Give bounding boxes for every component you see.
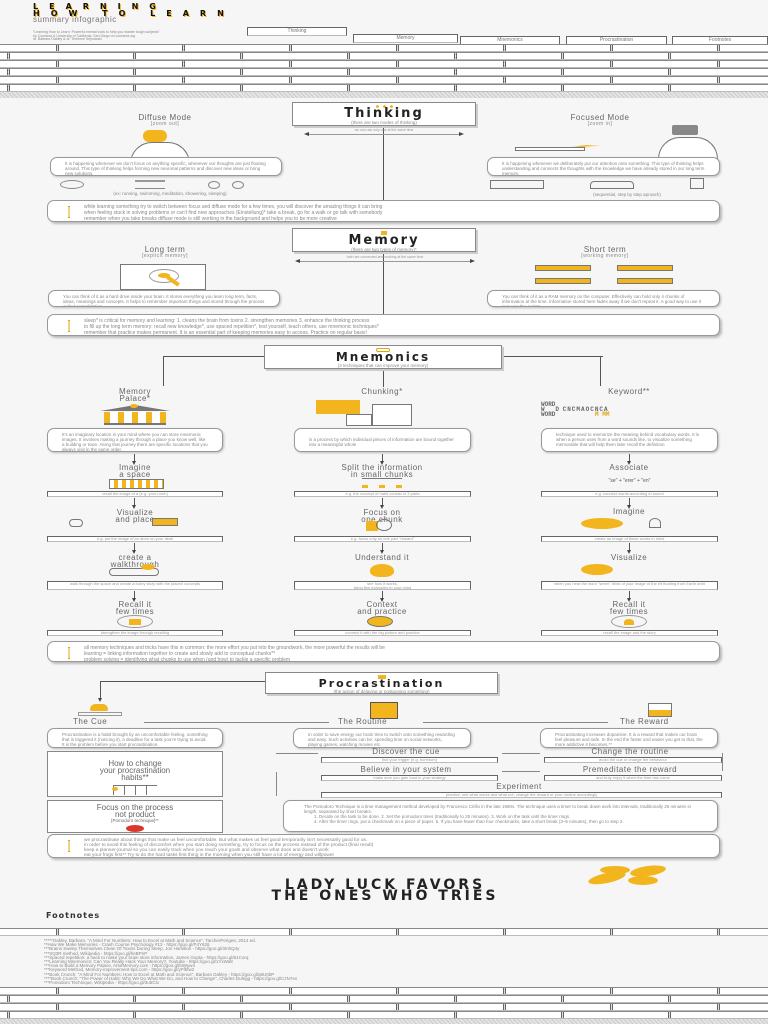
heading: Mnemonics: (3 techniques that can improve your memory)	[338, 363, 428, 368]
citation: dr. Barbara Oakley & dr. Terrence Sejnowski	[33, 37, 102, 41]
header title	[33, 2, 235, 18]
tip: sleep: to fill up the long term memory: recall new knowledge*, use spaced repetition*, test yourself, teach others, use mnemonic techniques*	[84, 324, 379, 330]
icons: diffuse activities	[60, 180, 244, 189]
tip: groundwork: learning = linking information together to create and slowly add to conceptual chunks**	[84, 651, 275, 657]
column: Chunking: Focus on	[364, 508, 400, 517]
tip: procrastination advice: in order to avoid this feeling of discomfort when you start doing something, try to focus on the process instead of the product (final result)	[84, 843, 373, 848]
label: Short term: [working memory]	[581, 253, 629, 259]
tip: switching modes	[47, 200, 720, 222]
nav tabs: Footnotes	[709, 37, 731, 43]
icon: RAM sticks	[535, 265, 673, 284]
column: Memory Palace: Imagine	[119, 463, 151, 472]
column: Keyword: e.g. connect words according to sound	[595, 491, 664, 496]
column: Keyword: few times	[610, 607, 648, 616]
column: Chunking: one chunk	[361, 515, 403, 524]
nav tabs: Memory	[396, 35, 415, 41]
column: Chunking: Context	[366, 600, 398, 609]
column: Memory Palace: e.g. put the image of an atom on your desk	[97, 536, 173, 541]
label: Diffuse Mode	[138, 113, 192, 127]
flow: cue routine reward: The Reward	[620, 717, 669, 726]
tip: procrastination advice: eat your frogs first** Try to do the hard tasks first thing in the morning when you still have a lot of energy and willpower	[84, 853, 334, 858]
label: Short term	[581, 245, 629, 259]
column: Chunking: connect it with the big picture and practice	[345, 630, 420, 635]
column: Memory Palace: Palace*	[119, 394, 151, 403]
text: footnotes list: *****Oakley, Barbara. "A Mind For Numbers: How to Excel at Math and Science", TarcherPerigee, 2014 ed.	[44, 938, 256, 943]
text: footnotes list: ****Book Crunch: "The Power of Habit: Why We Do What We Do, and How to Change", Charles Duhigg - https://goo.gl/CzN7ev	[44, 976, 297, 981]
steps: habit change flow: find your trigger (e.g. boredom)	[382, 757, 437, 762]
column: Chunking	[294, 387, 473, 636]
nav tabs	[247, 27, 768, 44]
text: diffuse bubble: It is happening whenever we don't focus on anything specific, whenever our thoughts are just floating around. This type of thinking helps forming new neuronal patterns and discover new ideas or bring new solutions.	[65, 161, 266, 176]
steps: habit change flow: Believe in your system	[360, 765, 452, 774]
tip: switching modes: while learning something try to switch between focus and diffuse mode for a few times, you will discover the amazing things it can bring	[84, 204, 382, 210]
column: Chunking: Understand it	[355, 553, 409, 562]
icon: diffuse head	[131, 130, 189, 157]
column: Memory Palace: strengthen the image through recalling	[101, 630, 169, 635]
text: footnotes list: ***How to Build a Memory Palace, ArtofMemory.com - https://goo.gl/5iWyw4	[44, 963, 195, 968]
heading: Procrastination: (the action of delaying or postponing something)	[333, 689, 430, 694]
text: reward bubble: Procrastinating increases dopamine. It is a reward that makes our brain feel pleasure and safe. In the end the faster and easier you get to that, the more addictive it becomes.**	[555, 732, 703, 747]
column: Chunking: Split the information	[341, 463, 423, 472]
column: Chunking: Chunking*	[361, 387, 403, 396]
column: Chunking: bring few examples in your mind	[354, 585, 411, 590]
text: focused bubble: It is happening whenever we deliberately put our attention onto something. This type of thinking helps understanding and connects the thoughts with the knowledge we have already stored in our long term memory.	[502, 161, 704, 176]
column: Keyword: Keyword**	[608, 387, 650, 396]
heading: Mnemonics: Mnemonics	[336, 350, 430, 364]
steps: habit change flow: Discover the cue	[372, 747, 440, 756]
heading: Memory: (there are two types of memory)*	[351, 247, 417, 252]
panel: Focus on process: not product	[115, 810, 155, 819]
icon: routine phone	[370, 702, 398, 719]
citation: "Learning How to Learn: Powerful mental tools to help you master tough subjects"	[33, 30, 160, 34]
column: Keyword: technique used to memorize the meaning behind vocabulary words. It is when a person uses from a word sounds like, to visualize something memorable that will help them later recall the definition	[556, 432, 699, 447]
flow: cue routine reward: The Cue	[73, 717, 107, 726]
column: Memory Palace: Visualize	[117, 508, 153, 517]
icon: hard drive	[120, 264, 206, 290]
nav tabs: Mnemonics	[497, 37, 523, 43]
header title: LEARNING	[33, 2, 167, 11]
tip: sleep: sleep* is critical for memory and learning: 1. cleans the brain from toxins 2. strengthen memories 3. enhance the thinking process	[84, 318, 369, 324]
column: Chunking: see how it works,	[367, 581, 398, 586]
panel: How to change habits: your procrastination	[100, 766, 170, 775]
column: Chunking: e.g. focus only on one part "reward"	[351, 536, 414, 541]
heading: Memory: Memory	[348, 233, 420, 248]
headline: lady luck: LADY LUCK FAVORS	[285, 877, 485, 893]
steps: habit change flow	[276, 747, 723, 798]
icon: palace	[100, 404, 170, 425]
column: Chunking: e.g. the concept of habit consist of 3 parts	[345, 491, 420, 496]
column: Keyword: recall the image and the story	[603, 630, 656, 635]
column: Memory Palace: few times	[116, 607, 154, 616]
text: footnotes list	[44, 938, 298, 985]
column: Memory Palace: a space	[119, 470, 151, 479]
text: cue bubble: Procrastination is a habit brought by an uncomfortable feeling, something that is triggered it (noticing it), a deadline for a task you're trying to avoid. It is the problem before you start procrastination.	[62, 732, 208, 747]
text: pomodoro bubble	[283, 800, 718, 832]
label: Focused Mode	[571, 113, 629, 127]
text: long term bubble	[48, 290, 280, 307]
column: Memory Palace: create a	[119, 553, 151, 562]
text: routine bubble	[293, 728, 471, 748]
tip: procrastination advice: we procrastinate about things that make us feel uncomfortable. But what makes us feel good temporarily isn't necessarily good for us.	[84, 838, 367, 843]
section: Mnemonics	[47, 345, 723, 665]
text: pomodoro bubble: The Pomodoro Technique is a time management method developed by Francesco Cirillo in the late 1980s. The technique uses a timer to break down work into intervals, traditionally 25 minutes in length, separated by short breaks.	[304, 804, 691, 814]
label: Long term: Long term	[145, 245, 185, 254]
flow: cue routine reward	[73, 717, 669, 726]
arrow: connected: both are connected and working at the same time	[347, 255, 423, 259]
panel: How to change habits: habits**	[121, 773, 149, 782]
icon: keyword	[541, 401, 610, 418]
text: reward bubble	[540, 728, 718, 748]
flow: cue routine reward: The Routine	[338, 717, 387, 726]
icon: clover	[588, 866, 666, 885]
column: Chunking: and practice	[357, 607, 407, 616]
section: Memory	[47, 228, 723, 339]
column: Keyword: create an image of these words in mind	[595, 536, 664, 541]
arrow: one at a time: we can use only one at the same time	[355, 128, 413, 132]
icon: keyword: WORD M MM	[541, 411, 609, 418]
text: footnotes list: ***Book Crunch: "A Mind For Numbers: How to Excel at Math and Science", Barbara Oakley - https://goo.gl/q8U0bP	[44, 972, 274, 977]
tip: switching modes: when feeling stuck in solving problems or can't find new approaches (Einstellung)* take a break, go for a walk or go talk with somebody	[84, 210, 382, 216]
icons: focused activities	[490, 178, 704, 189]
column: Keyword: Visualize	[611, 553, 647, 562]
text: footnotes list: ***Brains Sweep Themselves Clean Of Toxins During Sleep, Jon Hamilton - https://goo.gl/3mhQ4y	[44, 946, 239, 951]
label: Long term	[142, 245, 188, 259]
tip: sleep	[47, 314, 720, 336]
icon: reward	[648, 703, 672, 717]
panel: Focus on process: [Pomodoro technique]**	[111, 818, 159, 823]
headline: lady luck: THE ONES WHO TRIES	[272, 888, 498, 904]
column: Chunking: in small chunks	[351, 470, 413, 479]
label: Focused Mode: Focused Mode	[571, 113, 629, 122]
column: Memory Palace: and place	[115, 515, 155, 524]
steps: habit change flow: Premeditate the reward	[583, 765, 677, 774]
label: Diffuse Mode: Diffuse Mode	[138, 113, 192, 122]
label: Focused Mode: [zoom in]	[588, 121, 612, 127]
column: Keyword: when you hear the word "seren" think of your image of the elf floating from Earth orbit	[554, 581, 705, 586]
label: Long term: [explicit memory]	[142, 253, 188, 259]
text: diffuse bubble	[50, 157, 282, 176]
panel: Focus on process	[47, 800, 223, 833]
text: short term bubble	[487, 290, 720, 307]
nav tabs: Thinking	[288, 28, 306, 34]
caption: diffuse activities: (ex: running, swimming, meditation, showering, sleeping)	[113, 191, 227, 196]
column: Keyword	[541, 387, 720, 636]
nav tabs: Procrastination	[600, 37, 633, 43]
header title: HOW TO LEARN	[33, 9, 235, 18]
label: Short term: Short term	[584, 245, 626, 254]
column: Memory Palace	[47, 387, 225, 636]
section: Procrastination	[47, 672, 723, 861]
icon: keyword: W D CNCMAOCNCA	[541, 406, 609, 413]
heading: Thinking: (there are two modes of thinking)	[351, 120, 417, 125]
column: Keyword: Imagine	[613, 507, 645, 516]
text: footnotes list: ***Learning Mnemonics: Can You Really Hack Your Memory?, Youtube - https://goo.gl/1YxWa8	[44, 959, 233, 964]
text: cue bubble	[47, 728, 223, 748]
icon: puzzle	[316, 400, 412, 426]
tip: procrastination advice	[47, 834, 720, 858]
tip: procrastination advice: keep a planner-journal so you can easily track when you reach your goals and observe what does and doesn't work	[84, 848, 329, 853]
icon: cue bell	[78, 704, 122, 716]
column: Memory Palace: Memory	[119, 387, 151, 396]
column: Memory Palace: walk through the space and create a funny story with the placed concepts	[70, 581, 200, 586]
tip: groundwork	[47, 641, 720, 662]
steps: habit change flow: Experiment	[496, 782, 542, 791]
caption: sequential: (sequential, step by step aproach)	[593, 192, 661, 197]
heading: Mnemonics	[264, 345, 502, 369]
text: pomodoro bubble: 1. Decide on the task to be done. 2. Set the pomodoro timer (traditionally to 25 minutes). 3. Work on the task until the timer rings.	[314, 814, 570, 819]
subtitle: summary infographic	[33, 15, 117, 24]
panel: How to change habits: How to change	[108, 759, 162, 768]
tip: groundwork: all memory techniques and tricks have this in common: the more effort you put into the groundwork, the more powerful the results will be	[84, 645, 385, 651]
tip: sleep: remember that practice makes permanent. It is an essential part of keeping memories easy to access. Practice on regular basis!	[84, 330, 367, 336]
text: pomodoro bubble: 4. After the timer rings, put a checkmark on a piece of paper. 5. If you have fewer than four checkmarks, take a short break (3–5 minutes), then go to step 2.	[314, 819, 624, 824]
column: Keyword: Recall it	[613, 600, 645, 609]
column: Chunking: is a process by which individual pieces of information are bound together into a meaningful whole	[309, 437, 454, 447]
steps: habit change flow: and truly enjoy it when the time has come	[596, 775, 670, 780]
citation	[33, 30, 160, 41]
heading: Thinking: Thinking	[344, 106, 424, 121]
steps: habit change flow: practice, see what works and what not, change the reward or your routine accordingly	[446, 792, 597, 797]
column: Memory Palace: walkthrough	[111, 560, 159, 569]
heading: Footnotes: Footnotes	[46, 911, 100, 920]
text: footnotes list: **How We Make Memories - Crash Course Psychology #13 - https://goo.gl/P4Y626	[44, 942, 210, 947]
text: footnotes list: ***Spaced repetition: a hack to make your brain store information, James Gupta - https://goo.gl/61Corq	[44, 955, 248, 960]
text: footnotes list: ***Pomodoro Technique, Wikipedia - https://goo.gl/3u5Ctx	[44, 980, 159, 985]
heading: Procrastination	[265, 672, 498, 694]
steps: habit change flow: Change the routine	[591, 747, 669, 756]
column: Keyword: "se" + "erer" + "en"	[609, 478, 650, 484]
icon: keyword: WORD	[541, 401, 555, 408]
text: routine bubble: In order to save energy our brain tries to switch onto something rewarding and easy. Such activities can be: spending time on social networks, playing games, watching movies etc.	[308, 732, 455, 747]
icon: focused head	[515, 125, 718, 159]
column: Memory Palace: Recall it	[119, 600, 151, 609]
tip: switching modes: remember when you take breaks diffuse mode is still working in the background and helps you to be more creative	[84, 216, 337, 222]
text: focused bubble	[487, 157, 720, 176]
label: Diffuse Mode: [zoom out]	[151, 121, 179, 127]
column: Keyword: Associate	[609, 463, 649, 472]
steps: habit change flow: avoid the cue or change the behaviour	[599, 757, 667, 762]
column: Memory Palace: recall the image of a (e.g. your room)	[102, 491, 168, 496]
text: footnotes list: ***Keyword Method, Memory-improvement-tips.com - https://goo.gl/yFfbfw2	[44, 967, 194, 972]
text: footnotes list: ***SQ3R method, Wikipedia - https://goo.gl/heBPnP	[44, 951, 147, 956]
heading: Procrastination: Procrastination	[319, 677, 444, 690]
citation: by Coursera & University of California, San Diego on coursera.org	[33, 34, 135, 38]
panel: Focus on process: Focus on the process	[97, 803, 173, 812]
heading: Thinking	[292, 102, 476, 126]
headline: lady luck	[272, 877, 498, 904]
heading: Memory	[292, 228, 476, 252]
steps: habit change flow: make sure you gain trust in your strategy	[373, 775, 446, 780]
column: Memory Palace: It's an imaginary location in your mind where you can store mnemonic images. It involves making a journey through a place you know well, like a building or town. Along that journey there are specific locations that you always visit in the same order.	[62, 432, 208, 452]
panel: How to change habits	[47, 751, 223, 797]
section: Thinking	[47, 102, 723, 225]
